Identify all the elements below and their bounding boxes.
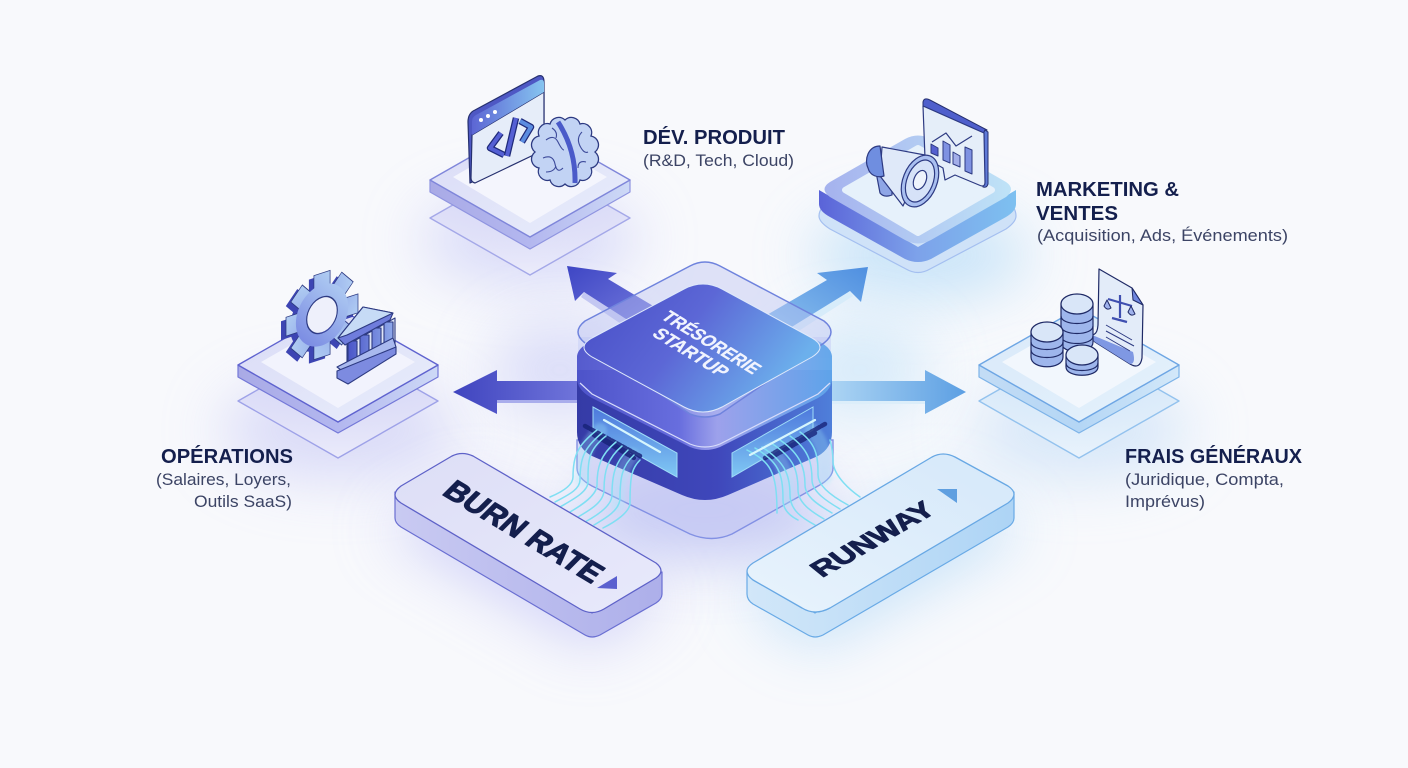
base glass plate [577, 440, 833, 538]
icon: legal document [1085, 269, 1143, 366]
platform: marketing [819, 136, 1016, 272]
left port window [593, 407, 677, 477]
heading: frais généraux: FRAIS GÉNÉRAUX [1125, 445, 1303, 468]
icon: code window [468, 76, 544, 183]
tag: burn rate [395, 454, 662, 637]
text: opérations details line 1: (Salaires, Loyers, [156, 470, 291, 489]
inner blue panel [584, 284, 820, 412]
text: frais details line 2: Imprévus) [1125, 492, 1205, 511]
arrow: right to frais généraux [820, 370, 966, 414]
platform: dév produit [430, 123, 630, 275]
text: marketing details: (Acquisition, Ads, Événements) [1037, 226, 1288, 245]
label: trésorerie: TRÉSORERIE [657, 307, 768, 377]
icon: coin stacks [1031, 294, 1098, 375]
panel: marketing et ventes [819, 99, 1288, 272]
panel: frais généraux [979, 269, 1303, 511]
glass lid top [578, 262, 831, 417]
icon: megaphone [866, 146, 946, 212]
bar label: RUNWAY [803, 497, 942, 582]
text: opérations details line 2: Outils SaaS) [194, 492, 292, 511]
lid front highlight [580, 383, 830, 447]
text: frais details line 1: (Juridique, Compta, [1125, 470, 1284, 489]
bar label: BURN RATE [436, 475, 611, 589]
icon: brain [531, 117, 599, 187]
bar top face [747, 454, 1014, 612]
icon: gear [281, 261, 358, 373]
glass lid rim [578, 337, 831, 358]
bar top face [395, 454, 661, 612]
text: dév produit details: (R&D, Tech, Cloud) [643, 151, 794, 170]
right port window [732, 407, 813, 477]
icon: analytics speech panel [923, 99, 988, 187]
central block: trésorerie startup [550, 262, 860, 538]
arrow: left to opérations [453, 370, 590, 414]
bar side face [747, 492, 1014, 637]
platform: frais généraux [979, 308, 1179, 458]
panel: développement produit [430, 76, 794, 275]
bar side face [395, 492, 662, 637]
dark core body [577, 370, 832, 500]
heading: dév produit: DÉV. PRODUIT [643, 126, 785, 149]
label: startup: STARTUP [648, 325, 735, 380]
soft glows [220, 195, 1190, 650]
heading line: ventes: VENTES [1036, 203, 1118, 225]
down marker [597, 576, 617, 589]
arrow: up-right to marketing [765, 267, 868, 335]
heading: opérations: OPÉRATIONS [161, 445, 293, 468]
marker [937, 489, 957, 503]
data flow lines right [747, 420, 860, 525]
icon: bank building [337, 307, 396, 384]
lid side [577, 285, 832, 450]
tag: runway [747, 454, 1014, 637]
arrow: up-left to dév produit [567, 266, 660, 335]
platform: opérations [238, 308, 438, 458]
data flow lines left [550, 420, 660, 528]
panel: opérations [156, 261, 438, 511]
heading: marketing et ventes: MARKETING & [1036, 179, 1179, 201]
